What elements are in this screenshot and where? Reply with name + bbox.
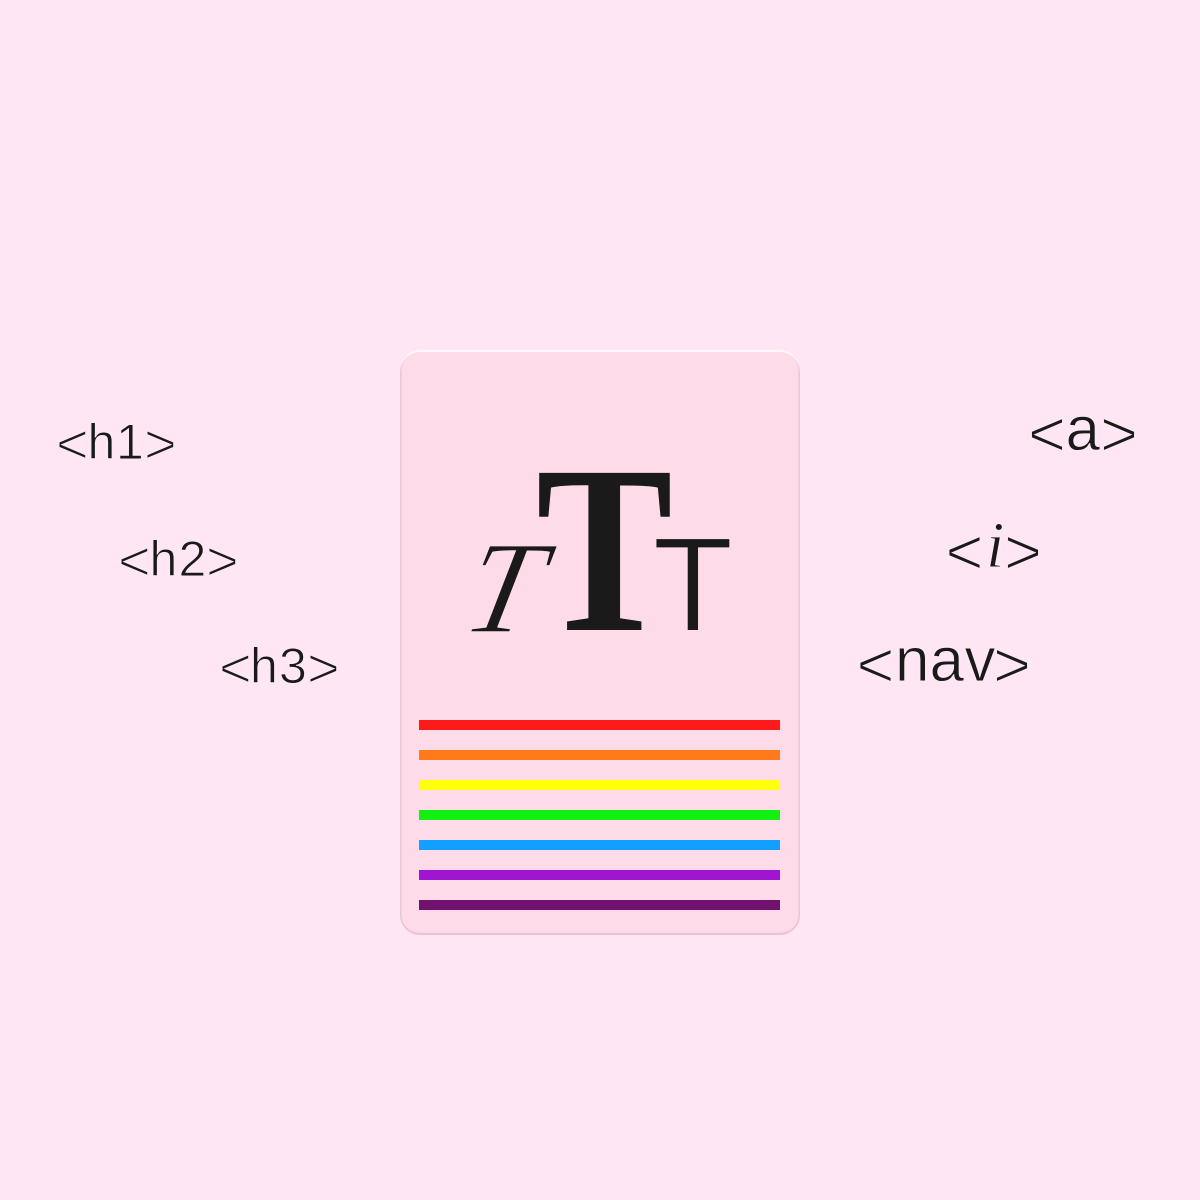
panel: type card: [400, 350, 800, 935]
bar: yellow: [419, 780, 780, 790]
tag: h2: h: [150, 531, 177, 587]
bar: orange: [419, 750, 780, 760]
tag: nav: <: [856, 628, 894, 701]
tag: h3: 3: [279, 638, 307, 694]
tag: h1: h: [88, 414, 115, 470]
tag: h1: <: [56, 412, 89, 475]
bar: blue: [419, 840, 780, 850]
bar: purple: [419, 870, 780, 880]
letter: sans T: T: [652, 510, 733, 660]
tag: nav: v: [964, 626, 996, 695]
letter: bold serif T: T: [536, 417, 673, 683]
tag: h1: 1: [116, 414, 144, 470]
tag: nav: a: [930, 626, 964, 695]
tag: h3: h: [250, 638, 278, 694]
tag: nav: >: [993, 628, 1031, 701]
bar: green: [419, 810, 780, 820]
tag: a: <: [1028, 397, 1066, 470]
tag: h2: >: [206, 529, 239, 592]
tag: nav: n: [895, 626, 929, 695]
tag: a: a: [1066, 395, 1100, 464]
tag: i: i: [986, 509, 1004, 582]
letter: script T: T: [453, 515, 565, 661]
tag: h2: 2: [178, 531, 206, 587]
tag: h3: >: [307, 636, 340, 699]
tag: i: >: [1004, 515, 1042, 588]
bar: red: [419, 720, 780, 730]
bar: dark purple: [419, 900, 780, 910]
tag: h3: <: [219, 636, 252, 699]
icon: three T letterforms: [453, 417, 733, 683]
tag: h2: <: [118, 529, 151, 592]
tag: h1: >: [144, 412, 177, 475]
tag: i: <: [946, 515, 983, 588]
tag: a: >: [1100, 397, 1138, 470]
